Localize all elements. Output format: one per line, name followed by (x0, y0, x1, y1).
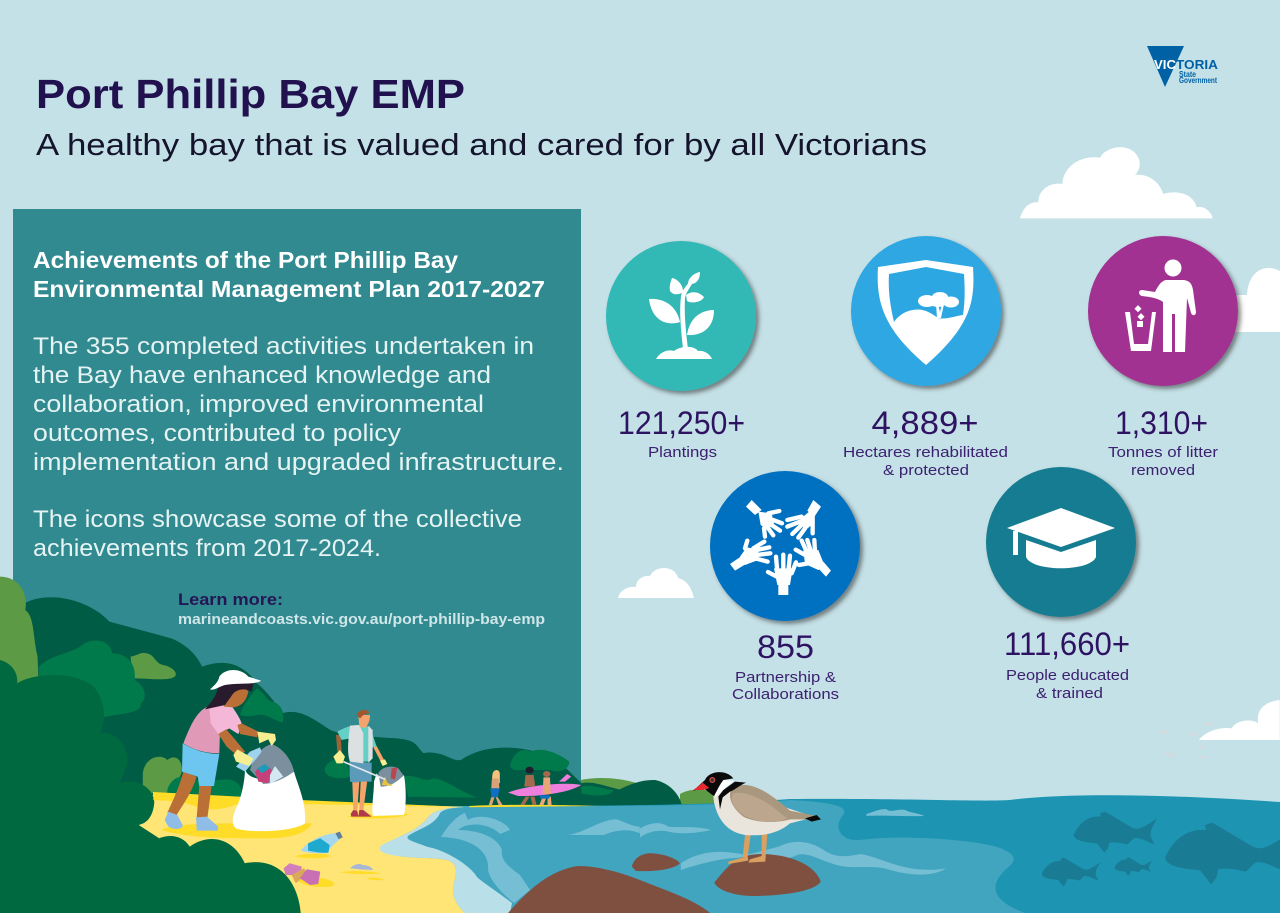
litter bag (372, 767, 406, 816)
plastic bottle (295, 832, 343, 858)
label: removed (1131, 462, 1195, 479)
panel heading (33, 247, 545, 302)
shirt highlight (209, 705, 242, 734)
logo: Victoria State Government (1147, 46, 1219, 87)
head (358, 715, 370, 728)
head (693, 772, 733, 796)
learn more link: Learn more: (178, 591, 283, 609)
tail tip (805, 815, 821, 822)
panel body text (33, 333, 564, 562)
face (224, 688, 248, 707)
stat: plantings (606, 241, 756, 461)
panel body text: The 355 completed activities undertaken in (33, 333, 534, 360)
subtitle: A healthy bay that is valued and cared for by all Victorians (36, 127, 927, 162)
back (730, 785, 817, 822)
white neck (715, 780, 734, 797)
shoes (351, 810, 372, 817)
legs (728, 834, 767, 864)
gloves (233, 732, 276, 766)
white belly (713, 787, 813, 835)
purple rubbish (284, 863, 334, 887)
stat: hectares (843, 236, 1008, 479)
scene: water ripples (441, 809, 946, 903)
scene: deep yellow strip (153, 792, 465, 807)
child with kayak (539, 771, 552, 805)
label: Tonnes of litter (1108, 444, 1218, 461)
rubbish bag (233, 744, 305, 831)
logo: Victoria State Government: TORIA (1176, 57, 1219, 72)
shirt (337, 725, 377, 762)
child in blue (489, 770, 503, 805)
collar (718, 782, 746, 809)
sun hat (210, 670, 261, 690)
panel: achievements (13, 209, 581, 799)
panel body text: the Bay have enhanced knowledge and (33, 362, 491, 389)
icon: five hands (730, 500, 831, 595)
label: & protected (883, 462, 969, 479)
label: & trained (1036, 685, 1103, 702)
scene: fish group (1042, 812, 1280, 886)
figure: woman collecting litter (153, 670, 312, 838)
scene: shallow water (400, 800, 1025, 913)
litter picker (343, 762, 385, 779)
vest (348, 725, 373, 763)
litter on sand (284, 832, 384, 887)
learn more link: marineandcoasts.vic.gov.au/port-phillip-bay-emp (178, 612, 545, 628)
panel heading: Achievements of the Port Phillip Bay (33, 247, 458, 273)
gloves (333, 750, 387, 766)
label (1006, 667, 1129, 702)
icon: seedling (649, 272, 714, 359)
arms (336, 735, 342, 752)
stat: people educated (986, 467, 1136, 702)
hair (357, 710, 370, 718)
cloud: right edge (1215, 268, 1280, 332)
scene: shore foam (380, 807, 512, 913)
legs (167, 772, 212, 818)
label (1108, 444, 1218, 479)
panel body text: outcomes, contributed to policy (33, 420, 401, 447)
hair (205, 682, 253, 709)
cloud: lower right (1199, 700, 1280, 740)
grey wrapper (339, 864, 384, 880)
icon: person and bin (1125, 260, 1196, 352)
arms (218, 723, 258, 757)
learn more link (178, 591, 545, 628)
panel body text: achievements from 2017-2024. (33, 535, 381, 562)
figures: distant kayakers (469, 767, 600, 807)
label: People educated (1006, 667, 1129, 684)
label: Plantings (648, 444, 717, 461)
label: Partnership & (735, 669, 836, 686)
cloud: small centre (618, 568, 694, 598)
sneakers (165, 812, 218, 831)
scene: sea (400, 795, 1280, 913)
legs (352, 781, 367, 810)
pupil (711, 778, 714, 782)
panel heading: Environmental Management Plan 2017-2027 (33, 276, 545, 302)
label: Collaborations (732, 686, 839, 703)
stat: litter (1088, 236, 1238, 479)
distant birds (1160, 723, 1212, 758)
number: 111,660+ (1004, 626, 1130, 662)
kayak (508, 774, 581, 796)
logo: Victoria State Government: State (1179, 70, 1196, 79)
title: Port Phillip Bay EMP (36, 71, 465, 117)
panel body text: The icons showcase some of the collective (33, 506, 522, 533)
number: 4,889+ (872, 405, 978, 441)
cloud: top right (1020, 147, 1213, 218)
bottle (236, 747, 262, 772)
eye (709, 777, 715, 783)
man with kayak (520, 767, 537, 805)
label: Hectares rehabilitated (843, 444, 1008, 461)
icon: graduation cap (1007, 508, 1115, 568)
scene: sand (100, 793, 465, 913)
shorts (182, 743, 219, 786)
scene: foreground bush (0, 660, 301, 913)
number: 1,310+ (1115, 405, 1208, 441)
label (732, 669, 839, 703)
wing (732, 793, 787, 822)
icon: plover bird (693, 772, 821, 864)
logo: Victoria State Government: VIC (1154, 57, 1177, 72)
number: 121,250+ (618, 405, 745, 441)
figure: man with litter picker (333, 710, 409, 818)
scene: rocks (508, 853, 821, 913)
scene: far hills (0, 577, 714, 812)
shirt (183, 706, 242, 753)
shorts (349, 762, 372, 783)
label (843, 444, 1008, 479)
panel body text: collaboration, improved environmental (33, 391, 484, 418)
panel body text: implementation and upgraded infrastructure. (33, 449, 564, 476)
beak (693, 783, 709, 790)
stat: partnerships (710, 471, 860, 703)
icon: shield with tree (878, 260, 973, 365)
logo: Victoria State Government: Government (1179, 76, 1217, 85)
number: 855 (757, 629, 814, 665)
